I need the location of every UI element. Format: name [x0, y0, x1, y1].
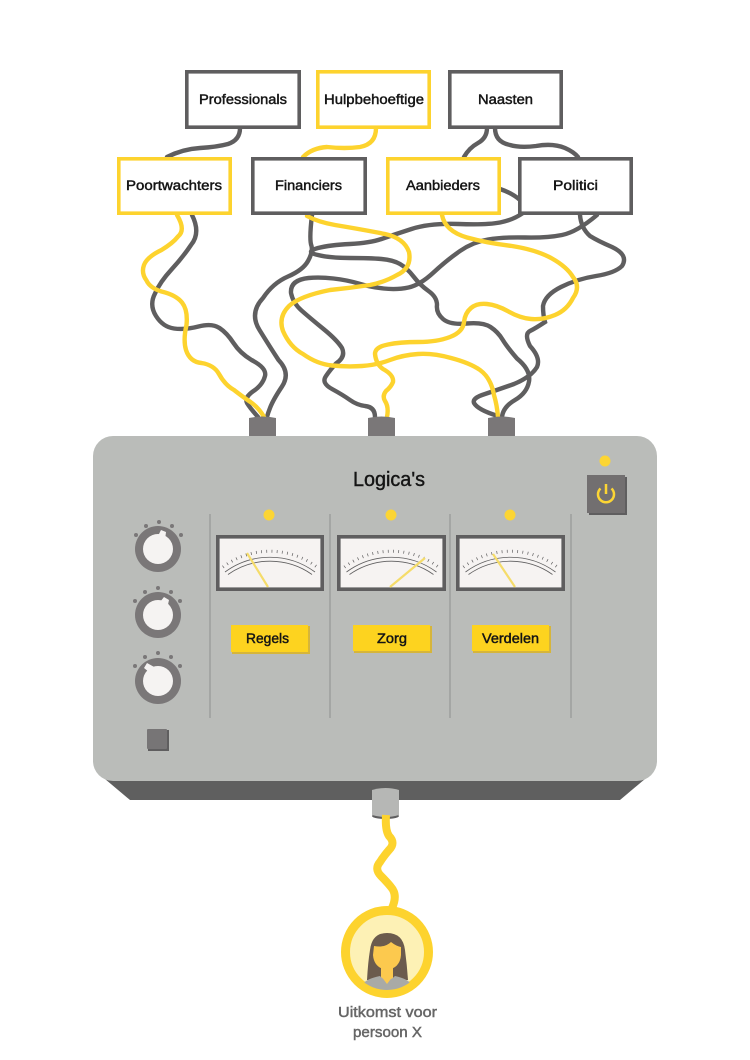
cables: yellow wires from boxes to the machine inputs	[143, 215, 577, 417]
button: Zorg	[353, 625, 432, 653]
box: Politici: Politici	[553, 178, 598, 193]
icon: person in circle	[346, 910, 428, 994]
knob 2	[133, 586, 182, 638]
box: Professionals	[187, 72, 299, 127]
machine base shadow	[105, 779, 645, 800]
button: Verdelen: Verdelen	[482, 631, 539, 646]
box: Professionals: Professionals	[199, 92, 287, 107]
box: Naasten: Naasten	[478, 92, 533, 107]
button: Verdelen	[472, 625, 551, 653]
box: Poortwachters	[119, 159, 230, 213]
box: Hulpbehoeftige: Hulpbehoeftige	[324, 92, 424, 107]
output cable	[377, 815, 395, 908]
cables: gray wires from boxes to the machine inputs	[152, 213, 624, 417]
cables: top connections between stakeholder boxes	[167, 128, 578, 200]
box: Politici	[520, 159, 631, 213]
dividers	[210, 514, 571, 718]
machine input connectors	[249, 416, 515, 437]
button: Regels: Regels	[246, 631, 289, 646]
box: Financiers: Financiers	[275, 178, 342, 193]
box: Financiers	[253, 159, 365, 213]
box: Aanbieders	[388, 159, 499, 213]
caption: Uitkomst voor persoon X: Uitkomst voor	[338, 1005, 437, 1021]
box: Poortwachters: Poortwachters	[126, 178, 222, 193]
output connector	[372, 788, 399, 819]
box: Naasten	[450, 72, 561, 127]
knob 3	[133, 651, 182, 704]
small square button	[147, 729, 169, 751]
heading: Logica's: Logica's	[353, 469, 425, 491]
machine body	[93, 436, 657, 781]
meter: Zorg	[339, 537, 444, 589]
button: Zorg: Zorg	[377, 631, 407, 646]
indicator lights	[264, 456, 610, 520]
box: Hulpbehoeftige	[318, 72, 429, 127]
button: Regels	[231, 625, 310, 654]
icon: power button	[587, 475, 627, 515]
meter: Verdelen	[458, 537, 563, 589]
knob 1	[134, 520, 183, 572]
caption: Uitkomst voor persoon X	[338, 1005, 437, 1041]
box: Aanbieders: Aanbieders	[406, 178, 480, 193]
caption: Uitkomst voor persoon X: persoon X	[353, 1025, 422, 1041]
meter: Regels	[218, 537, 322, 589]
